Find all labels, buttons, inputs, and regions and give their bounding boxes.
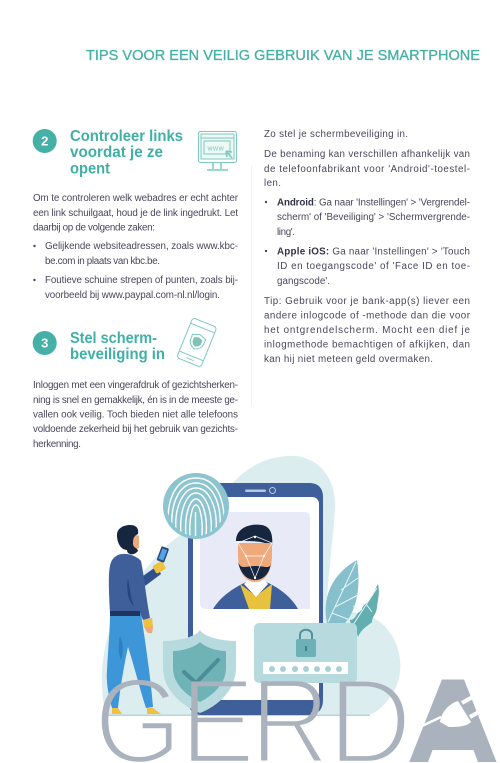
- bullet list: link checks: be.com in plaats van kbc.be.: [45, 256, 160, 267]
- thin wordmark letters: [102, 680, 404, 762]
- number badge 2: [33, 129, 57, 153]
- section 2 body text: een link schuilgaat, houd je de link ingedrukt. Let: [33, 208, 238, 219]
- icon: padlock: [296, 630, 316, 657]
- bullet list: link checks: Gelijkende websiteadressen, zoals www.kbc-: [45, 241, 238, 252]
- trousers: [107, 614, 153, 708]
- section 3 body text: voldoende zekerheid bij het gebruik van gezichts-: [33, 424, 238, 435]
- right column intro text: [264, 129, 470, 189]
- tip text: kan hij niet meteen geld overmaken.: [264, 354, 433, 365]
- section 3 heading: [33, 330, 165, 363]
- tip text: andere inlogcode of -methode dan die voor: [264, 310, 471, 322]
- section 3 body text: herkenning.: [33, 439, 81, 450]
- illustration: phone security: [102, 456, 400, 716]
- bullet list: settings paths: [265, 198, 470, 287]
- lock card: [254, 623, 357, 683]
- section 3 body text: [33, 380, 238, 450]
- bullet list: settings paths: Apple iOS: Ga naar 'Instellingen' > 'Touch: [277, 246, 470, 258]
- background blob: [102, 456, 400, 715]
- bullet list: link checks: [33, 241, 238, 301]
- raised arm: [143, 566, 161, 586]
- fingerprint stem: [188, 535, 193, 640]
- phone: [188, 483, 323, 715]
- heading text: [70, 330, 165, 363]
- title: TIPS VOOR EEN VEILIG GEBRUIK VAN JE SMARTPHONE: [86, 48, 480, 64]
- bullet list: settings paths: ling'.: [277, 227, 295, 238]
- smartphone: [157, 546, 169, 563]
- tip text: Tip: Gebruik voor je bank-app(s) liever een: [264, 296, 470, 307]
- person with phone: [107, 525, 169, 714]
- heading text: opent: [70, 160, 110, 178]
- bullet list: settings paths: scherm' of 'Beveiliging' > 'Schermvergrende-: [277, 212, 470, 223]
- leaves: [326, 560, 379, 637]
- face scan screen: [200, 512, 310, 609]
- section 2 body text: [33, 193, 239, 234]
- number badge 3: 3: [41, 336, 48, 350]
- number badge 2: 2: [41, 134, 48, 148]
- head: [130, 532, 139, 552]
- tip text: inlogmethode bemachtigen of afkijken, dan: [264, 340, 470, 350]
- right column intro text: len.: [264, 178, 281, 189]
- tip text: het ontgrendelscherm. Mocht een dief je: [264, 325, 471, 336]
- icon: www monitor: [198, 132, 236, 170]
- section 3 body text: Inloggen met een vingerafdruk of gezichtsherken-: [33, 380, 238, 391]
- section 2 body text: daarbij op de volgende zaken:: [33, 222, 155, 234]
- right column intro text: de telefoonfabrikant voor 'Android'-toestel-: [264, 164, 470, 175]
- heading text: Controleer links: [70, 128, 183, 145]
- logo: GERDA: [102, 680, 496, 762]
- portrait: [213, 525, 298, 609]
- shield with check: [163, 630, 236, 713]
- sweater: [109, 554, 150, 620]
- icon: www monitor: www: [206, 146, 225, 152]
- tip text: [264, 296, 471, 365]
- heading text: [70, 128, 183, 178]
- bullet list: settings paths: Android: Ga naar 'Instellingen' > 'Vergrendel-: [277, 198, 470, 208]
- section 3 body text: vallen ook veilig. Toch bieden niet alle telefoons: [33, 410, 238, 420]
- right column intro text: Zo stel je schermbeveiliging in.: [264, 129, 408, 140]
- heading text: beveiliging in: [70, 346, 165, 363]
- heading text: Stel scherm-: [70, 330, 157, 347]
- icon: fingerprint: [163, 473, 229, 539]
- bullet list: settings paths: gangscode'.: [277, 276, 330, 287]
- password field: [263, 662, 348, 674]
- section 3 body text: ning is snel en gemakkelijk, én is in de meeste ge-: [33, 395, 238, 406]
- bullet list: link checks: voorbeeld bij www.paypal.com-nl.nl/login.: [45, 290, 220, 301]
- ground line: [106, 714, 370, 716]
- section 2 heading: [33, 128, 183, 178]
- bullet list: link checks: Foutieve schuine strepen of punten, zoals bij-: [45, 275, 238, 286]
- heading text: voordat je ze: [70, 144, 163, 161]
- section 2 body text: Om te controleren welk webadres er echt achter: [33, 193, 239, 204]
- hand: [143, 618, 153, 633]
- icon: phone with shield: [177, 318, 217, 367]
- bullet list: settings paths: ID en toegangscode' of 'Face ID en toe-: [277, 261, 470, 272]
- right column intro text: De benaming kan verschillen afhankelijk van: [264, 149, 470, 160]
- shoes: [112, 708, 122, 714]
